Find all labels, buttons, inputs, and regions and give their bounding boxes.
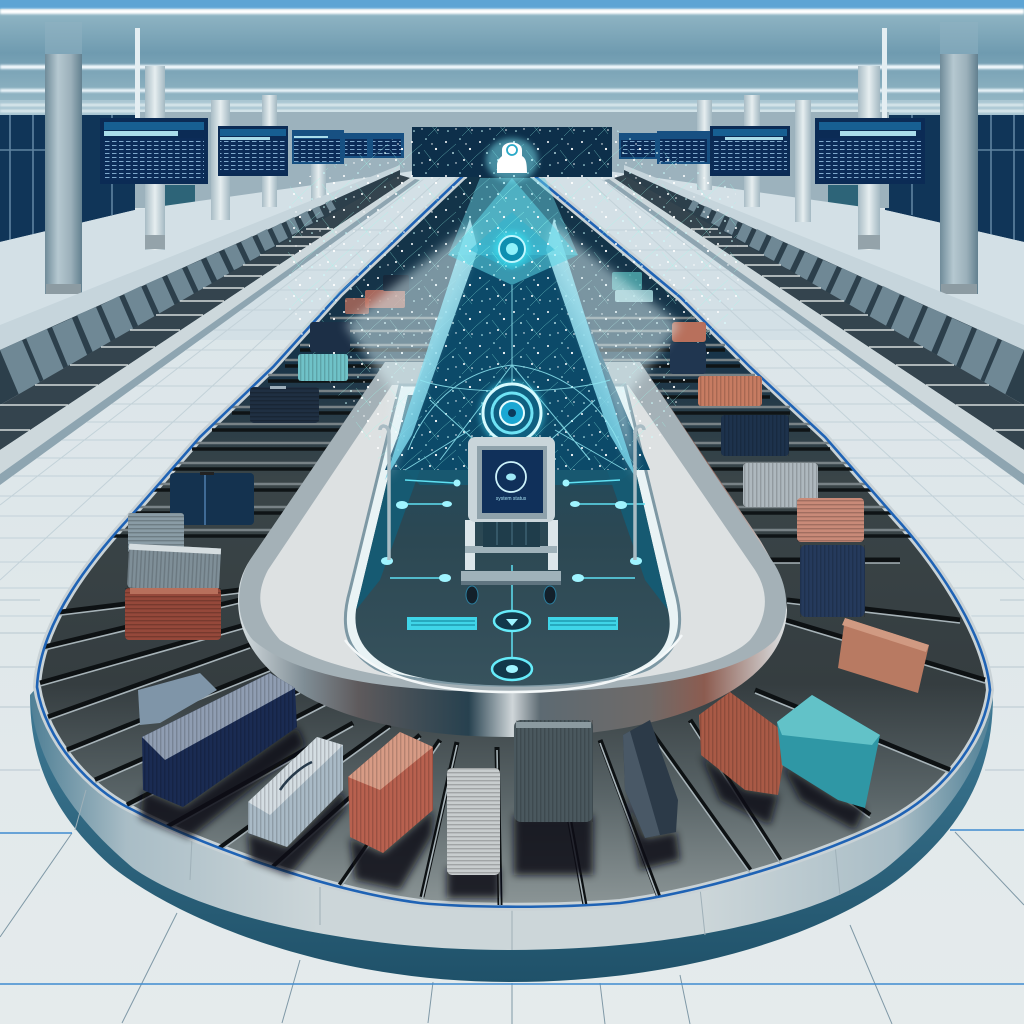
- speck network overlay: [285, 127, 740, 470]
- windows left: [0, 115, 135, 242]
- hexagon shield: [448, 178, 578, 285]
- suitcase shadows: [140, 727, 865, 898]
- upper cyan glow between wings: [448, 178, 578, 255]
- side carousel right: [604, 165, 1024, 485]
- columns: [45, 22, 978, 294]
- island rim: [238, 362, 787, 737]
- robot wheels: [466, 586, 556, 604]
- island front edge highlight: [345, 635, 682, 692]
- floor display bars: [407, 617, 618, 630]
- robot screen: [477, 446, 547, 519]
- screen caption: system status: [496, 496, 527, 502]
- windows right: [885, 115, 1024, 242]
- main carousel belt: [37, 172, 990, 908]
- walkway tile lines: [0, 178, 1024, 616]
- stanchion left: [380, 426, 389, 560]
- right translucent net wing: [546, 218, 680, 480]
- main carousel outer rim: [30, 687, 993, 982]
- ceiling: [0, 0, 1024, 118]
- icon: padlock: [486, 138, 538, 182]
- floor ring upper: [494, 611, 530, 631]
- side carousel left: [0, 165, 420, 485]
- ceiling light strips: [0, 9, 1024, 112]
- inner dark panel: [345, 385, 680, 686]
- robot body: [468, 437, 555, 522]
- robot cart base: [461, 520, 561, 585]
- left translucent net wing: [345, 218, 478, 480]
- robot: [461, 437, 561, 604]
- floor circuit lines and nodes: [381, 480, 645, 680]
- icon: eye node: [494, 231, 530, 267]
- data net backdrop: [385, 127, 650, 485]
- rim silver band: [30, 687, 993, 950]
- network lines: [405, 285, 625, 470]
- back wall: [0, 112, 1024, 340]
- departure screens left: [100, 118, 404, 184]
- suitcases far right: [612, 272, 929, 693]
- suitcases far left: [125, 275, 409, 640]
- departure screens right: [619, 118, 925, 184]
- stanchion right: [635, 426, 644, 560]
- floor tile grid: [0, 600, 1024, 1024]
- suitcases front: [138, 673, 880, 875]
- island top surface: [260, 385, 765, 686]
- floor ring lower: [492, 658, 532, 680]
- icon: target ring above robot: [479, 380, 545, 446]
